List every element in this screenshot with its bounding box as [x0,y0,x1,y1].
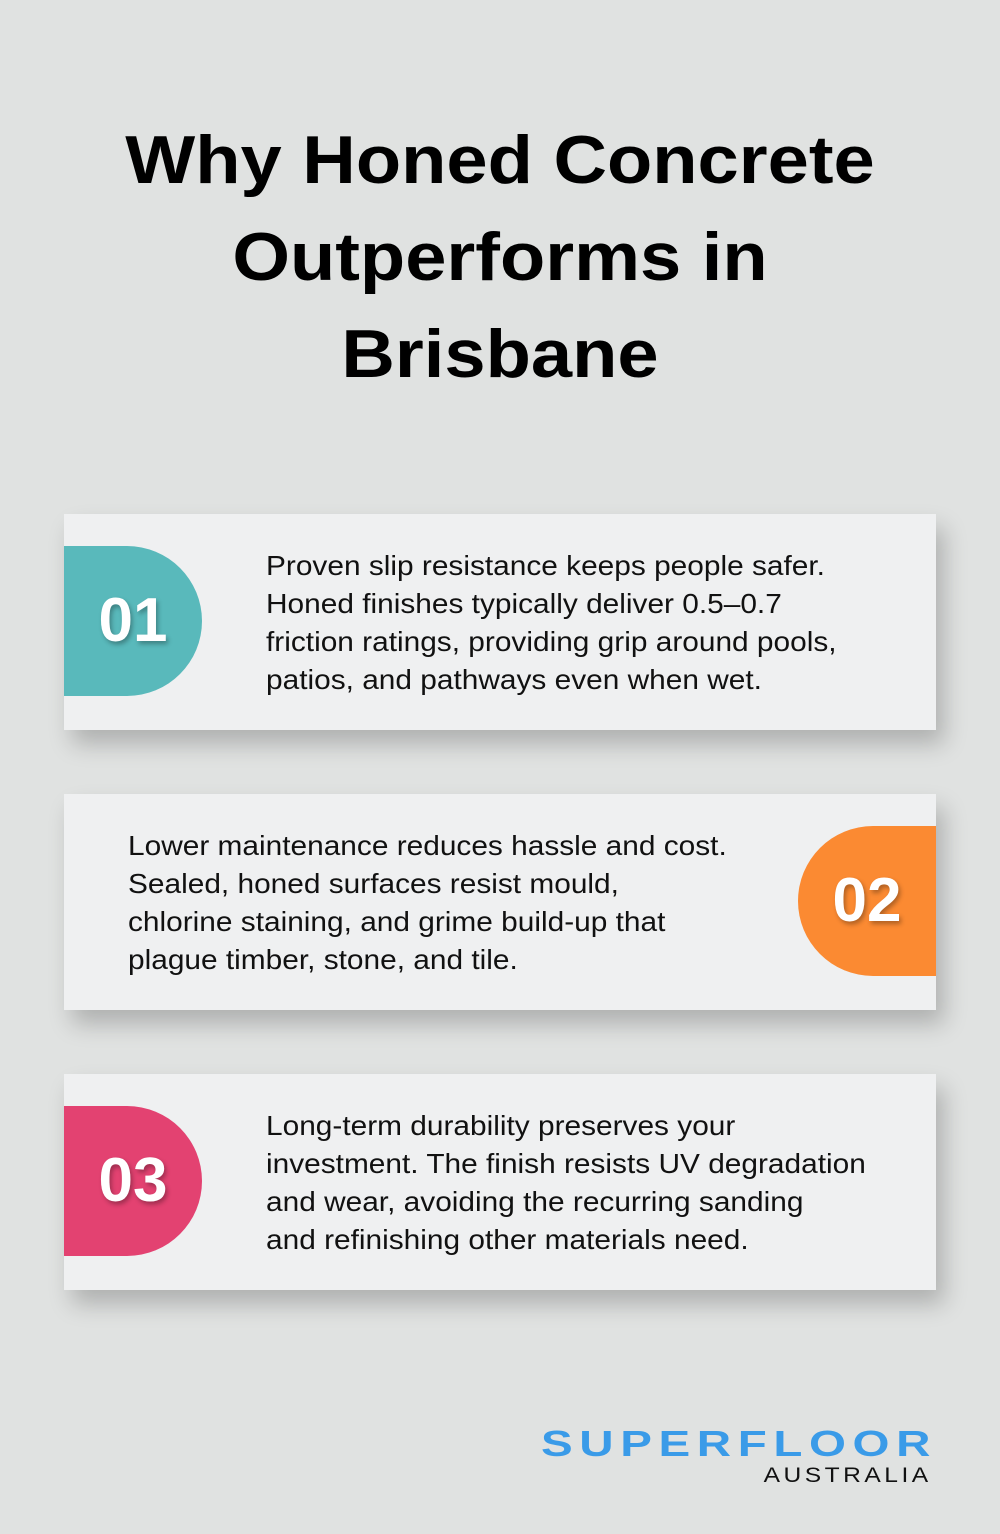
text 1: patios, and pathways even when wet. [266,664,762,695]
logo [541,1423,937,1487]
text 2 [128,830,727,975]
badge 01 [64,546,202,696]
text 3: and refinishing other materials need. [266,1224,749,1255]
title: Why Honed Concrete [125,122,875,198]
text 2: Sealed, honed surfaces resist mould, [128,868,619,899]
text 2: chlorine staining, and grime build-up that [128,906,665,937]
text 1: Proven slip resistance keeps people safer. [266,550,825,581]
text 3: investment. The finish resists UV degradation [266,1148,866,1179]
logo: AUSTRALIA [764,1464,932,1487]
text 1: friction ratings, providing grip around pools, [266,626,837,657]
panel: card 2 [64,794,936,1010]
title: Outperforms in [232,219,768,295]
panel: card 3 [64,1074,936,1290]
badge 02: 02 [833,866,901,935]
badge 03 [64,1106,202,1256]
badge 03: 03 [99,1146,167,1215]
text 3: and wear, avoiding the recurring sanding [266,1186,803,1217]
logo: SUPERFLOOR [541,1423,937,1464]
title: Brisbane [341,316,659,392]
text 1 [266,550,837,695]
title [125,122,875,392]
badge 01: 01 [99,586,167,655]
text 1: Honed finishes typically deliver 0.5–0.7 [266,588,782,619]
badge 02 [798,826,936,976]
text 3 [266,1110,866,1255]
panel: card 1 [64,514,936,730]
text 2: plague timber, stone, and tile. [128,944,518,975]
text 2: Lower maintenance reduces hassle and cost. [128,830,727,861]
text 3: Long-term durability preserves your [266,1110,735,1141]
